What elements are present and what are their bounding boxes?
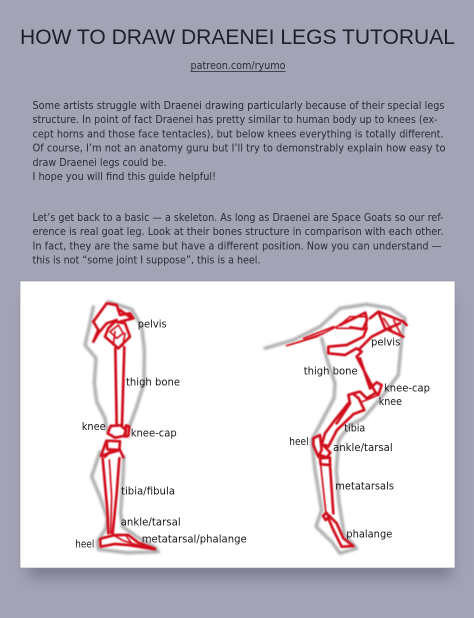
labels: goat leg: knee-cap xyxy=(384,381,430,394)
labels: human leg: heel xyxy=(75,538,94,551)
labels: human leg: pelvis xyxy=(138,318,167,331)
text block: skeleton explanation: In fact, they are the same but have a different position. Now you can understand — xyxy=(32,240,442,252)
tibia xyxy=(325,394,364,447)
foot bones xyxy=(102,535,154,548)
labels: goat leg: pelvis xyxy=(371,336,401,349)
labels: goat leg: knee xyxy=(379,395,402,408)
knee xyxy=(337,392,375,423)
text block: introduction xyxy=(32,100,446,183)
panel shadow xyxy=(28,296,452,578)
pelvis bones xyxy=(287,317,367,346)
labels: goat leg: thigh bone xyxy=(304,364,358,377)
text block: skeleton explanation: this is not “some joint I suppose”, this is a heel. xyxy=(32,255,260,267)
labels: goat leg: metatarsals xyxy=(335,479,394,492)
text block: skeleton explanation: erence is real goat leg. Look at their bones structure in comparison with each other. xyxy=(32,226,444,238)
text block: introduction: I hope you will find this guide helpful! xyxy=(32,171,216,183)
goat leg skeleton xyxy=(265,304,407,553)
tibia head xyxy=(107,441,120,450)
metatarsals xyxy=(321,465,326,513)
shin bones xyxy=(103,458,108,533)
labels: human leg: metatarsal/phalange xyxy=(142,532,247,545)
pelvis bones xyxy=(93,303,133,322)
phalange bones xyxy=(323,513,329,520)
labels: goat leg: tibia xyxy=(344,422,365,435)
heel xyxy=(313,435,322,457)
text block: introduction: draw Draenei legs could be. xyxy=(32,157,166,169)
link: patreon: patreon.com/ryumo xyxy=(190,60,286,72)
panel: skeleton comparison xyxy=(20,281,455,568)
labels: goat leg xyxy=(289,336,430,540)
text block: introduction: Some artists struggle with Draenei drawing particularly because of their special legs xyxy=(32,100,444,112)
text block: introduction: Of course, I’m not an anatomy guru but I’ll try to demonstrably explain how easy to xyxy=(32,143,446,155)
labels: goat leg: heel xyxy=(289,435,309,448)
labels: human leg: tibia/fibula xyxy=(121,484,175,497)
labels: human leg: knee-cap xyxy=(131,426,177,439)
labels: human leg xyxy=(75,318,247,551)
text block: skeleton explanation xyxy=(32,212,444,267)
knee xyxy=(108,425,126,438)
text block: introduction: structure. In point of fact Draenei has pretty similar to human body up to knees (ex- xyxy=(32,114,438,126)
labels: goat leg: ankle/tarsal xyxy=(333,441,393,454)
title: HOW TO DRAW DRAENEI LEGS TUTORUAL xyxy=(20,24,455,49)
human leg skeleton xyxy=(85,302,158,553)
femur xyxy=(115,348,117,425)
labels: human leg: knee xyxy=(82,420,106,433)
text block: introduction: cept horns and those face tentacles), but below knees everything is totally different. xyxy=(32,128,444,140)
femur xyxy=(328,328,382,395)
labels: human leg: thigh bone xyxy=(126,376,180,389)
text block: skeleton explanation: Let’s get back to a basic — a skeleton. As long as Draenei are Space Goats so our ref- xyxy=(32,212,444,224)
labels: goat leg: phalange xyxy=(346,527,393,540)
labels: human leg: ankle/tarsal xyxy=(121,516,181,529)
tarsal block xyxy=(320,458,330,465)
